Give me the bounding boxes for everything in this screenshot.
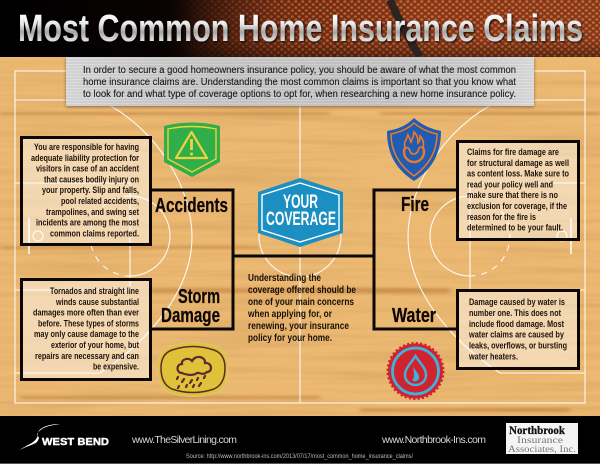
panel: accidents text [22, 138, 150, 244]
panel: fire text: read your policy well and [467, 179, 553, 189]
heading: storm damage [161, 286, 220, 327]
panel: fire text: determined to be your fault. [467, 223, 563, 233]
icon: yellow storm badge [158, 342, 228, 396]
panel: accidents text: trampolines, and swing set [46, 207, 139, 217]
panel: fire text: reason for the fire is [467, 212, 536, 222]
link: The Silver Lining: www.TheSilverLining.com [131, 434, 237, 446]
heading: storm damage: Damage [161, 305, 220, 327]
center text [247, 272, 356, 344]
panel: fire text: exclusion for coverage, if the [467, 201, 567, 211]
center text: policy for your home. [248, 332, 332, 344]
panel: water text: water claims are caused by [468, 330, 564, 340]
panel: fire text: as content loss. Make sure to [467, 169, 569, 179]
heading: water: Water [392, 305, 436, 327]
panel: storm damage text: winds cause substantial [55, 297, 139, 307]
panel: accidents text: pool related accidents, [61, 196, 139, 206]
icon: your coverage hexagon: YOUR [283, 192, 318, 213]
intro panel [66, 57, 534, 106]
header: basketball banner [150, 0, 600, 57]
intro panel: to look for and what type of coverage options to opt for, when researching a new home insurance policy. [83, 89, 516, 100]
panel: accidents text: that causes bodily injury on [44, 174, 139, 184]
logo: Northbrook Insurance Associates: Northbrook [509, 423, 565, 437]
panel: storm damage text: be expensive. [93, 362, 139, 372]
icon: blue fire shield [387, 118, 441, 181]
panel: fire text: Claims for fire damage are [467, 147, 559, 157]
icon: red water badge [388, 343, 444, 399]
court lines [15, 71, 585, 403]
wood court background [0, 57, 600, 417]
icon: your coverage hexagon: COVERAGE [266, 209, 336, 230]
panel: accidents text: incidents are among the most [36, 218, 139, 228]
center text: coverage offered should be [248, 284, 356, 296]
panel: accidents text: visitors in case of an accident [36, 164, 139, 174]
logo: West Bend: WEST BEND [42, 436, 109, 448]
panel: water text: water heaters. [468, 352, 518, 362]
panel: storm damage text: Tornados and straight line [50, 286, 139, 296]
logo: Northbrook Insurance Associates: Insurance [517, 436, 563, 446]
panel: water text: include flood damage. Most [469, 319, 564, 329]
link: Northbrook: www.Northbrook-Ins.com [381, 434, 486, 446]
heading: storm damage: Storm [178, 286, 220, 308]
footer band [0, 416, 600, 464]
logo: West Bend [18, 424, 109, 451]
panel: water text: leaks, overflows, or bursting [469, 341, 567, 351]
panel: storm damage text: exterior of your home, but [51, 340, 139, 350]
panel: water text [458, 290, 578, 368]
panel: fire text: for structural damage as well [467, 158, 569, 168]
panel: storm damage text: may only cause damage to the [34, 329, 139, 339]
panel: storm damage text: damages more often than ever [33, 308, 139, 318]
panel: storm damage text [22, 280, 150, 380]
icon: green warning shield [164, 122, 220, 177]
logo: Northbrook Insurance Associates: Associates, Inc. [508, 445, 576, 455]
panel: water text: number one. This does not [469, 308, 561, 318]
panel: accidents text: adequate liability protection for [31, 153, 139, 163]
center text: one of your main concerns [248, 296, 354, 308]
center text: when applying for, or [247, 308, 332, 320]
icon: your coverage hexagon [258, 178, 343, 247]
panel: fire text: make sure that there is no [467, 190, 558, 200]
panel: storm damage text: before. These types of storms [38, 318, 139, 328]
panel: fire text [458, 142, 578, 240]
intro panel: home insurance claims are. Understanding the most common claims is important so that you know what [83, 77, 516, 88]
logo: Northbrook Insurance Associates [506, 423, 578, 455]
panel: accidents text: your property. Slip and falls, [42, 185, 139, 195]
panel: accidents text: common claims reported. [50, 228, 139, 238]
heading: accidents: Accidents [155, 195, 228, 217]
bracket connectors [152, 190, 457, 329]
intro panel: In order to secure a good homeowners insurance policy, you should be aware of what the most common [83, 65, 516, 76]
panel: water text: Damage caused by water is [469, 297, 565, 307]
source line: Source: http://www.northbrook-ins.com/2013/07/17/most_common_home_insurance_claims/ [186, 453, 413, 460]
center text: renewing, your insurance [248, 320, 349, 332]
panel: accidents text: You are responsible for having [34, 142, 139, 152]
center text: Understanding the [248, 272, 321, 284]
panel: storm damage text: repairs are necessary and can [35, 351, 139, 361]
heading: fire: Fire [401, 194, 429, 216]
